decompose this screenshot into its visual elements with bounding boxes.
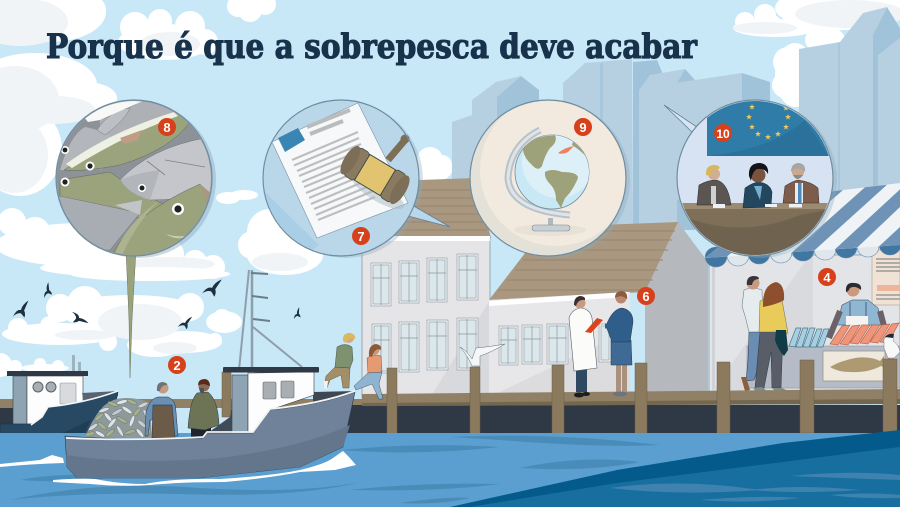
- fisherman in green coat: [188, 379, 219, 438]
- panel member middle: [743, 163, 777, 208]
- building: low house: [489, 222, 708, 397]
- panel member left: [697, 165, 731, 208]
- badge 7: [352, 227, 370, 245]
- mast and boom: [239, 270, 302, 370]
- vendor: [829, 283, 884, 338]
- EU flag: [278, 128, 305, 152]
- dock: [0, 389, 900, 438]
- bubble 7: regulation and gavel: [263, 100, 450, 260]
- scientist and official: [569, 291, 633, 398]
- document text: [307, 110, 350, 134]
- market stall: [747, 283, 900, 388]
- badge 9: [574, 118, 592, 136]
- badge 8: 8: [163, 120, 171, 135]
- birds: [11, 279, 304, 329]
- EU stars: [746, 104, 791, 140]
- badge 4: 4: [823, 270, 831, 285]
- poster: [872, 250, 900, 305]
- gull on post: [460, 344, 505, 366]
- panel member right: [783, 163, 819, 208]
- foam under grey boat: [53, 451, 356, 486]
- runner adult: [324, 333, 355, 389]
- water: [0, 430, 900, 507]
- badge 8: [158, 118, 176, 136]
- bubble 8: fish: [55, 95, 216, 378]
- badge 4: [818, 268, 836, 286]
- gavel: [337, 134, 413, 215]
- number badges: [158, 118, 836, 374]
- badge 2: 2: [173, 358, 181, 373]
- iced fish: [789, 328, 829, 347]
- official: [605, 291, 633, 396]
- fish pile on boat: [85, 398, 152, 438]
- fisherman in apron: [145, 382, 178, 438]
- badge 7: 7: [357, 229, 365, 244]
- title: Porque é que a sobrepesca deve acabar: [46, 27, 698, 67]
- bubble 9: globe: [470, 94, 632, 258]
- grey fishing boat: [65, 270, 355, 478]
- badge 9: 9: [579, 120, 587, 135]
- badge 10: 10: [716, 127, 730, 141]
- scientist: [569, 296, 603, 398]
- skyline: [452, 7, 900, 230]
- bubble 10: EU panel: [664, 95, 837, 259]
- awning: [705, 182, 900, 267]
- badge 10: [714, 124, 732, 142]
- tern on post: [884, 334, 900, 360]
- pilings: [387, 359, 897, 435]
- salmon fish: [830, 323, 899, 345]
- building: large white house: [362, 178, 491, 398]
- dark fishing boat: [0, 355, 118, 465]
- clouds: [0, 0, 900, 377]
- hull: [65, 392, 355, 478]
- badge 6: 6: [642, 289, 650, 304]
- badge 2: [168, 356, 186, 374]
- runner child: [354, 344, 383, 399]
- sign with fish: [823, 351, 885, 381]
- couple at the stall: [741, 276, 788, 393]
- badge 6: [637, 287, 655, 305]
- foam behind dark boat: [0, 455, 64, 467]
- market building: [709, 250, 900, 395]
